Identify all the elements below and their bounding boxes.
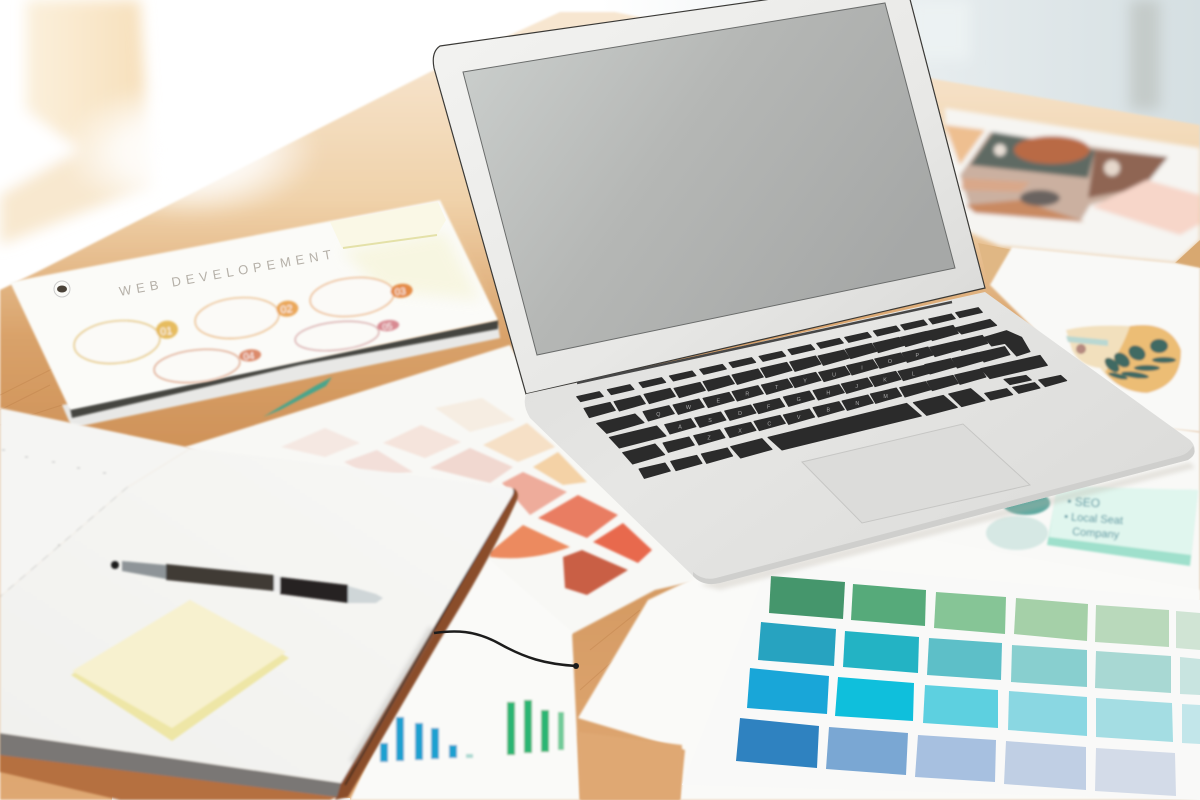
key legends: X <box>738 428 742 434</box>
laptop screen <box>463 3 955 355</box>
paper with leaf illustration <box>990 247 1200 432</box>
notebook <box>0 408 518 800</box>
brochure cover <box>10 200 498 410</box>
key legends: E <box>717 398 721 404</box>
sticky note with list: • Local Seat <box>1064 511 1123 527</box>
key legends: U <box>832 372 836 378</box>
circle 01 <box>72 315 181 367</box>
window frame post and sill <box>0 0 152 245</box>
laptop base front edge <box>693 446 1195 584</box>
circle 04 <box>153 343 263 386</box>
home row <box>609 347 1010 448</box>
logo mark <box>54 281 70 297</box>
brochure lower pages <box>62 325 500 428</box>
key legends: K <box>883 377 887 383</box>
photo collage <box>960 132 1168 222</box>
brochure: web development <box>10 200 500 428</box>
wood patches around the lid <box>978 243 1013 283</box>
white paper corner at the bottom left <box>112 782 350 800</box>
shift row <box>623 355 1047 464</box>
key legends <box>656 353 920 442</box>
key legends: J <box>855 384 858 390</box>
key legends: Z <box>707 436 711 442</box>
circle 02: 02 <box>280 303 293 316</box>
wood shadow beneath notebook <box>0 753 337 800</box>
key legends: P <box>916 353 920 359</box>
key legends: W <box>686 405 692 411</box>
key legends: L <box>912 371 915 377</box>
circle 01: 01 <box>160 325 173 338</box>
key legends: O <box>888 359 892 365</box>
row 3 blues <box>747 668 1200 744</box>
key legends: T <box>775 385 779 391</box>
colour swatch sheet: cool tones <box>682 560 1200 800</box>
circle 04: 04 <box>243 351 255 363</box>
circle 02 <box>193 292 301 342</box>
green stripe on sheet <box>263 377 332 417</box>
wood wedge lower middle <box>578 732 682 800</box>
notebook cover edge <box>335 488 518 800</box>
row 4 indigo tints <box>736 718 1176 796</box>
wood grain <box>0 365 640 690</box>
pen <box>111 561 383 603</box>
blue bars <box>380 717 473 762</box>
key legends: G <box>797 397 801 403</box>
heading: WEB DEVELOPEMENT <box>118 246 337 299</box>
teal circles <box>986 491 1050 550</box>
row 1 greens <box>769 576 1200 650</box>
function row <box>577 308 982 402</box>
sticky tab <box>330 202 446 248</box>
notebook page block <box>0 733 341 797</box>
key legends: N <box>855 401 859 407</box>
key legends: R <box>745 392 749 398</box>
key legends: F <box>767 404 771 410</box>
handwriting on left page <box>0 450 128 597</box>
green bars <box>507 700 564 755</box>
qwerty row <box>597 331 1030 433</box>
key legends: M <box>883 394 888 400</box>
pink note <box>1092 180 1200 235</box>
sticky note with list: • SEO <box>1067 494 1101 510</box>
key legends: C <box>767 421 771 427</box>
bottom row with space bar <box>639 375 1067 478</box>
key legends: A <box>678 425 682 431</box>
white sheet behind swatches <box>578 530 1200 800</box>
bar chart sheet, bottom centre <box>350 560 580 800</box>
laptop base <box>525 292 1195 584</box>
rear blurred strip <box>910 0 1160 110</box>
key legends: Y <box>803 378 807 384</box>
sticky note on notebook <box>71 600 289 741</box>
laptop <box>433 0 1195 590</box>
number row <box>584 319 997 418</box>
keyboard <box>577 308 1067 478</box>
trackpad <box>802 424 1030 523</box>
elastic band shadow on page <box>352 628 432 762</box>
key legends: I <box>861 366 863 372</box>
key legends: S <box>708 418 712 424</box>
sticky note with list: Company <box>1072 526 1120 541</box>
sunlight glow on table <box>60 80 320 220</box>
key legends: D <box>738 411 742 417</box>
left page <box>0 408 191 597</box>
laptop lid <box>433 0 985 394</box>
sticky note with list <box>1047 486 1198 566</box>
row 2 teals <box>758 622 1200 695</box>
key legends: Q <box>656 412 660 418</box>
key legends: V <box>797 415 801 421</box>
elastic cord <box>434 631 579 669</box>
yellow tint shadow <box>342 232 480 300</box>
circle 05 <box>294 315 401 354</box>
colour swatch sheet: warm tones <box>185 345 700 660</box>
laptop base shadow <box>700 462 1195 590</box>
photo print sheet, top right <box>945 108 1200 263</box>
icon: peach blob with leaves <box>1066 325 1181 393</box>
right lower white paper <box>880 422 1200 640</box>
key legends: H <box>826 391 830 397</box>
hinge slot <box>577 302 952 383</box>
circle 05: 05 <box>382 321 393 332</box>
circle 03: 03 <box>394 286 407 298</box>
right page <box>0 448 513 783</box>
key legends: B <box>827 408 831 414</box>
circle 03 <box>308 272 415 320</box>
